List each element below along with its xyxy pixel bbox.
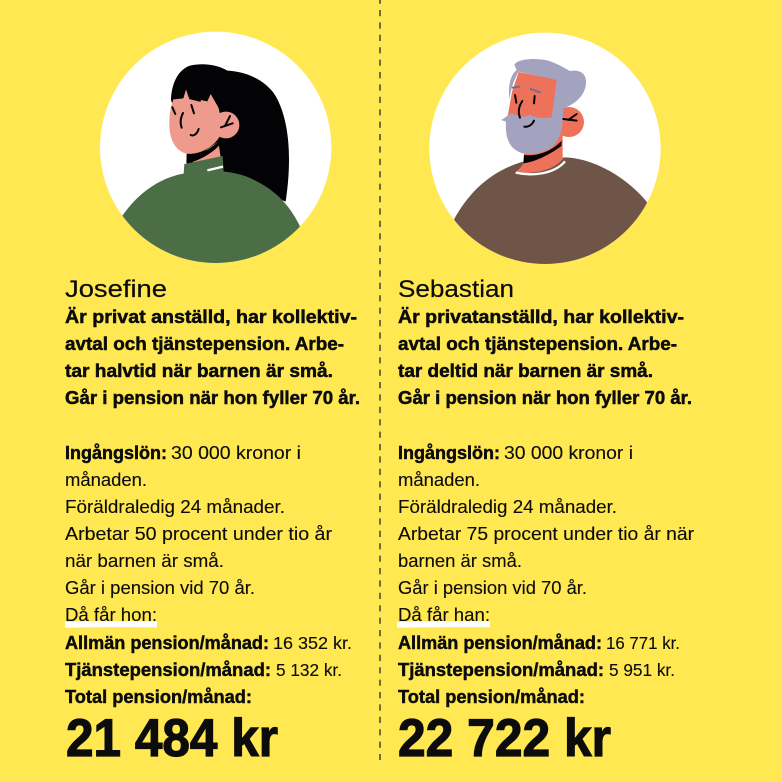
intro text: Sebastian: Går i pension när hon fyller 70 år.	[398, 387, 692, 408]
result text: Josefine: Total pension/månad:	[65, 687, 252, 707]
details text: Sebastian: månaden.	[398, 470, 480, 490]
intro text: Sebastian: tar deltid när barnen är små.	[398, 360, 653, 381]
name: Josefine: Josefine	[65, 276, 167, 303]
details text: Josefine: Föräldraledig 24 månader.	[65, 497, 285, 517]
result text: Josefine: Tjänstepension/månad:	[65, 660, 271, 680]
result text: Sebastian: 5 951 kr.	[609, 660, 675, 680]
details text: Sebastian	[398, 443, 694, 598]
intro text: Josefine: avtal och tjänstepension. Arbe-	[65, 333, 344, 354]
intro text: Sebastian: Är privatanställd, har kollektiv-	[398, 306, 684, 327]
details text: Josefine: Arbetar 50 procent under tio år	[65, 524, 332, 544]
intro text: Josefine: tar halvtid när barnen är små.	[65, 360, 333, 381]
details text: Josefine: 30 000 kronor i	[171, 443, 301, 463]
panel: Sebastian	[397, 33, 694, 768]
details text: Sebastian: Arbetar 75 procent under tio år när	[398, 524, 694, 544]
underline: Då får han	[397, 621, 490, 628]
center dashed divider	[379, 0, 381, 760]
result text: Josefine	[65, 605, 352, 707]
details text: Josefine	[65, 443, 332, 598]
name: Sebastian: Sebastian	[398, 276, 514, 303]
details text: Sebastian: Ingångslön:	[398, 443, 500, 463]
result text: Sebastian: 16 771 kr.	[606, 633, 680, 653]
intro text: Sebastian: avtal och tjänstepension. Arbe-	[398, 333, 677, 354]
total: Josefine: 21 484 kr	[66, 709, 278, 768]
icon: Sebastian portrait	[429, 33, 661, 273]
details text: Josefine: månaden.	[65, 470, 147, 490]
result text: Josefine: 16 352 kr.	[273, 633, 352, 653]
icon: Josefine portrait	[100, 32, 331, 273]
intro text: Josefine: Är privat anställd, har kollektiv-	[65, 306, 357, 327]
details text: Sebastian: Går i pension vid 70 år.	[398, 578, 587, 598]
details text: Sebastian: Föräldraledig 24 månader.	[398, 497, 617, 517]
details text: Sebastian: barnen är små.	[398, 551, 522, 571]
result text: Sebastian: Allmän pension/månad:	[398, 633, 602, 653]
result text: Josefine: Allmän pension/månad:	[65, 633, 269, 653]
details text: Josefine: när barnen är små.	[65, 551, 224, 571]
result text: Sebastian: Tjänstepension/månad:	[398, 660, 604, 680]
result text: Sebastian	[398, 605, 680, 707]
panel: Josefine	[65, 32, 360, 768]
result text: Josefine: Då får hon:	[65, 605, 157, 625]
underline: Då får hon	[65, 621, 157, 628]
intro text: Josefine	[65, 306, 360, 408]
intro text: Josefine: Går i pension när hon fyller 70 år.	[65, 387, 360, 408]
details text: Josefine: Ingångslön:	[65, 443, 167, 463]
details text: Sebastian: 30 000 kronor i	[504, 443, 633, 463]
result text: Sebastian: Då får han:	[398, 605, 490, 625]
total: Sebastian: 22 722 kr	[398, 709, 611, 768]
result text: Josefine: 5 132 kr.	[276, 660, 342, 680]
details text: Josefine: Går i pension vid 70 år.	[65, 578, 255, 598]
result text: Sebastian: Total pension/månad:	[398, 687, 585, 707]
intro text: Sebastian	[398, 306, 692, 408]
